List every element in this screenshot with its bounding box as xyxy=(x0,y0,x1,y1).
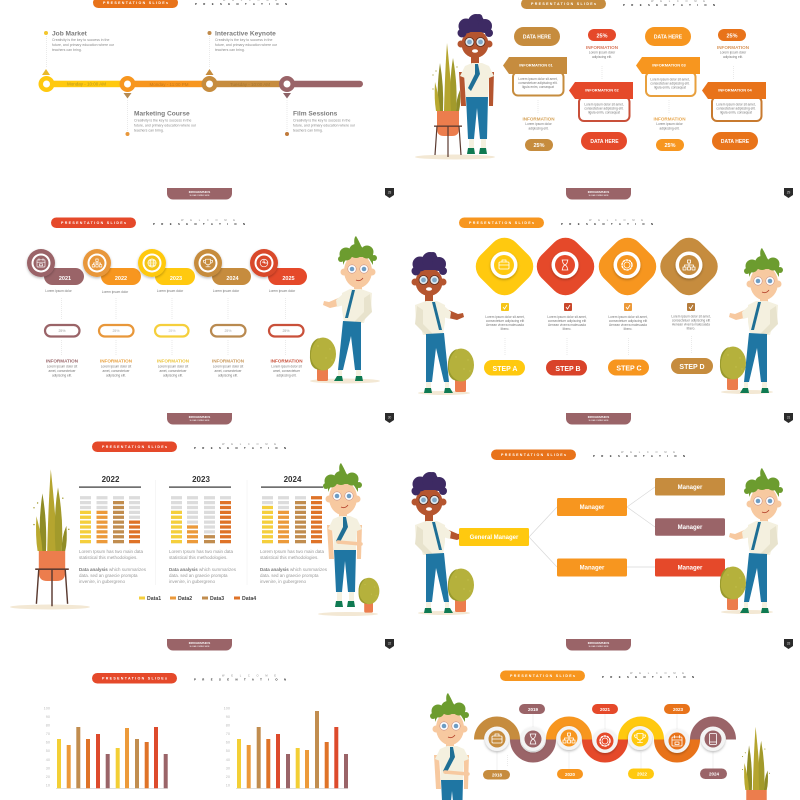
step 2025: amet, consectetuer xyxy=(273,369,301,373)
bar chart: left: 100 xyxy=(44,706,50,710)
slide header: PRESENTATION SLIDEs xyxy=(102,445,167,449)
slide 32 footer tab: INFOGRAPHICS xyxy=(189,641,210,645)
column 3: 25% xyxy=(664,143,676,149)
panel: slide 30 footer tab: INFOGRAPHICS xyxy=(189,415,210,419)
step D: consectetuer adipiscing elit xyxy=(672,318,710,322)
step C: consectetuer adipiscing elit xyxy=(609,319,647,323)
milestone: Marketing Course: Creativity is the key to success in the xyxy=(134,118,191,122)
step 2024 xyxy=(194,249,251,378)
text block: 2024: statistical this methodologies. xyxy=(260,555,319,560)
bar chart: right: 90 xyxy=(226,715,230,719)
slide 31 footer tab: INFOGRAPHICS xyxy=(588,415,609,419)
bar chart: left: 50 xyxy=(46,749,50,753)
step 2021: 25% xyxy=(58,329,66,333)
page badge 33 xyxy=(784,639,793,649)
text block: 2023 xyxy=(169,549,237,584)
page badge 30: 30 xyxy=(388,416,391,420)
column 3: INFORMATION xyxy=(653,116,686,122)
legend: Data3 xyxy=(210,596,224,602)
slide header: WELCOME xyxy=(222,674,276,678)
panel: slide 32 data bars xyxy=(10,442,379,616)
node: Manager level 3 tan xyxy=(655,478,725,496)
column 4: DATA HERE xyxy=(721,139,750,145)
node 2021: 2021 xyxy=(600,707,611,712)
column 1: Lorem ipsum dolor xyxy=(525,122,553,126)
legend xyxy=(139,596,256,602)
footer tab xyxy=(167,188,232,200)
slide header: PRESENTATION SLIDEs xyxy=(102,677,167,681)
node: Manager level 3 mauve xyxy=(655,518,725,536)
step 2025: adipiscing elit. xyxy=(276,374,297,378)
milestone: Job Market: Job Market xyxy=(52,30,88,37)
column 2: Lorem ipsum dolor xyxy=(589,50,616,54)
footer tab: INFOGRAPHICS xyxy=(588,190,609,194)
step B: Lorem ipsum dolor sit amet, xyxy=(547,315,587,319)
panel: slide 33 org chart xyxy=(412,450,783,615)
footer tab: INFOGRAPHICS xyxy=(189,190,210,194)
node 2023: 2023 xyxy=(673,707,684,712)
column 4: Lorem ipsum dolor sit amet, xyxy=(716,102,756,106)
milestone: Film Sessions: Film Sessions xyxy=(293,110,338,118)
node 2021 xyxy=(592,704,618,753)
step 2024: adipiscing elit. xyxy=(218,374,238,378)
step B: Aenean viverra malesuada xyxy=(548,323,586,327)
illustration: presenting man with cactus xyxy=(310,236,380,384)
node: Manager level 2 top: Manager xyxy=(580,505,605,511)
step D: libero. xyxy=(687,326,695,330)
timeline bar: Tuesday - 10:00 AM xyxy=(230,82,270,87)
step 2024: amet, consectetuer xyxy=(214,369,242,373)
slide header: WELCOME xyxy=(621,450,675,454)
milestone: Job Market xyxy=(42,30,115,75)
step D xyxy=(654,231,724,374)
column 1: INFORMATION 01 xyxy=(519,62,554,68)
connector lines xyxy=(497,714,713,770)
column 4: 25% xyxy=(726,34,738,40)
panel: slide 30 footer tab: SLOGAN COMPANY HERE xyxy=(190,419,209,422)
node 2018 xyxy=(483,727,510,780)
node: Manager level 3 mauve: Manager xyxy=(678,525,703,531)
footer tab: SLOGAN COMPANY HERE xyxy=(589,194,608,197)
bar chart: right: 50 xyxy=(226,749,230,753)
text block: 2022: Data analysis which summarizes xyxy=(79,567,147,572)
step B xyxy=(530,231,601,376)
column 3: ligula enim, consequat xyxy=(654,86,686,90)
milestone: Marketing Course: future, and primary education where our xyxy=(134,124,197,128)
text block: 2023: Data analysis which summarizes xyxy=(169,567,237,572)
step 2022: Lorem ipsum dolor xyxy=(102,290,129,294)
timeline bar: Monday - 10:00 AM xyxy=(67,82,106,86)
slide header: PRESENTATION xyxy=(194,446,286,450)
panel: slide 30 footer tab xyxy=(167,413,232,424)
panel: slide 28 timeline xyxy=(38,0,394,200)
timeline bar xyxy=(38,76,363,92)
step 2025: INFORMATION xyxy=(270,358,303,364)
node 2024: 2024 xyxy=(709,772,720,776)
illustration: standing man with cactus xyxy=(318,463,379,616)
node: Manager level 3 red xyxy=(655,558,725,576)
column 1: consectetuer adipiscing elit. xyxy=(518,81,558,85)
chart: 2022: 2022 xyxy=(102,475,120,484)
column 1 xyxy=(503,27,567,151)
slide header: PRESENTATION xyxy=(194,678,286,682)
illustration: presenting man right xyxy=(720,468,783,614)
slide header xyxy=(491,450,685,460)
step 2021: adipiscing elit. xyxy=(52,374,72,378)
milestone: Interactive Keynote: teachers can bring. xyxy=(215,48,245,52)
column 2: ligula enim, consequat xyxy=(588,110,620,114)
milestone: Job Market: teachers can bring. xyxy=(52,48,82,52)
slide header xyxy=(521,0,715,9)
illustration: standing man xyxy=(430,693,469,800)
column 4: INFORMATION xyxy=(717,45,750,50)
bar chart: right: 60 xyxy=(226,741,230,745)
node 2022 xyxy=(628,726,654,779)
step 2021: Lorem ipsum dolor sit xyxy=(47,364,77,368)
illustration: standing boy xyxy=(458,14,494,154)
page badge 31 xyxy=(784,413,793,423)
column 2 xyxy=(569,29,633,150)
node: Manager level 3 red: Manager xyxy=(678,566,703,572)
column 3: consectetuer adipiscing elit. xyxy=(650,82,690,86)
text block: 2024: Data analysis which summarizes xyxy=(260,567,328,572)
text block: 2024 xyxy=(260,549,328,584)
column 3: INFORMATION 03 xyxy=(652,62,687,68)
milestone: Film Sessions: future, and primary education where our xyxy=(293,124,356,128)
slide header: PRESENTATION SLIDEs xyxy=(469,221,534,225)
text block: 2023: invenire, in gubergreno xyxy=(169,579,216,584)
step B: libero. xyxy=(563,327,571,331)
slide header: PRESENTATION SLIDEs xyxy=(103,1,168,5)
bar chart: left: 30 xyxy=(46,766,50,770)
bar chart: left: 70 xyxy=(46,732,50,736)
slide header xyxy=(500,670,694,681)
slide 31 footer tab: SLOGAN COMPANY HERE xyxy=(589,419,608,422)
node 2019: 2019 xyxy=(528,707,539,712)
milestone: Job Market: Creativity is the key to success in the xyxy=(52,38,109,42)
text block: 2022 xyxy=(79,549,147,584)
column 3: adipiscing elit. xyxy=(659,126,680,130)
step 2023: amet, consectetuer xyxy=(159,369,187,373)
step 2022: 25% xyxy=(112,329,120,333)
step 2025: Lorem ipsum dolor sit xyxy=(271,364,302,368)
panel: slide 31 four steps xyxy=(412,218,783,395)
column 2: INFORMATION xyxy=(586,45,619,50)
slide header: PRESENTATION SLIDEs xyxy=(501,453,566,457)
column 3 xyxy=(636,27,700,151)
panel: slide 30 yearly steps xyxy=(27,218,380,384)
panel: slide 35 wave timeline xyxy=(430,670,770,800)
milestone: Marketing Course: teachers can bring. xyxy=(134,128,164,132)
slide 32 footer tab: SLOGAN COMPANY HERE xyxy=(190,645,209,648)
legend: Data4 xyxy=(242,596,256,602)
illustration: plant on stand xyxy=(10,469,90,610)
step 2023: 2023 xyxy=(170,276,182,282)
column 2: 25% xyxy=(596,34,608,40)
column 1: INFORMATION xyxy=(522,116,555,122)
column 3: Lorem ipsum dolor sit amet, xyxy=(650,78,690,82)
step 2022 xyxy=(83,249,141,378)
slide header: WELCOME xyxy=(589,218,643,222)
node 2022: 2022 xyxy=(637,772,648,776)
step D: Lorem ipsum dolor sit amet, xyxy=(671,314,711,318)
node 2024 xyxy=(700,727,727,779)
milestone: Marketing Course xyxy=(124,93,197,136)
text block: 2023: data. sed an graecie prompta xyxy=(169,573,228,578)
column 4: INFORMATION 04 xyxy=(718,88,753,92)
step D: STEP D xyxy=(679,364,705,371)
node 2020: 2020 xyxy=(565,772,576,777)
slide header: PRESENTATION xyxy=(195,2,287,6)
step 2024: Lorem ipsum dolor xyxy=(213,289,240,293)
page badge 32: 32 xyxy=(388,642,391,646)
slide header: WELCOME xyxy=(181,218,235,222)
panel: slide 34 bar charts xyxy=(44,673,348,789)
step B: STEP B xyxy=(555,366,581,373)
text block: 2024: invenire, in gubergreno xyxy=(260,579,307,584)
step C: STEP C xyxy=(616,366,642,372)
text block: 2022: data. sed an graecie prompta xyxy=(79,573,138,578)
column 1: ligula enim, consequat xyxy=(522,85,554,89)
step 2025: Lorem ipsum dolor xyxy=(269,289,296,293)
illustration: presenting man right xyxy=(720,248,783,394)
step D: Aenean viverra malesuada xyxy=(672,322,710,326)
column 2: INFORMATION 02 xyxy=(585,88,620,92)
column 4: consectetuer adipiscing elit. xyxy=(716,106,756,110)
chart: 2023 xyxy=(169,475,231,543)
column 3: DATA HERE xyxy=(654,34,683,40)
step 2024: Lorem ipsum dolor sit xyxy=(213,364,243,368)
step A xyxy=(469,231,540,376)
slide header: PRESENTATION xyxy=(602,675,694,679)
illustration: plant xyxy=(742,727,770,800)
bar chart: left: 40 xyxy=(46,758,50,762)
wave ribbon xyxy=(479,722,731,758)
milestone: Job Market: future, and primary education where our xyxy=(52,43,115,47)
step C: Lorem ipsum dolor sit amet, xyxy=(608,315,648,319)
column 4: ligula enim, consequat xyxy=(720,110,752,114)
page badge xyxy=(385,188,394,198)
step 2021: Lorem ipsum dolor xyxy=(45,289,73,293)
slide header: PRESENTATION xyxy=(623,3,715,7)
step C: Aenean viverra malesuada xyxy=(609,323,647,327)
bar chart: left: 20 xyxy=(46,775,50,779)
text block: 2022: statistical this methodologies. xyxy=(79,555,138,560)
milestone: Marketing Course: Marketing Course xyxy=(134,110,190,118)
milestone: Interactive Keynote: Creativity is the key to success in the xyxy=(215,38,272,42)
page badge 31: 31 xyxy=(787,416,790,420)
slide header: PRESENTATION xyxy=(593,454,685,458)
node: Manager level 2 bottom xyxy=(557,558,627,576)
milestone: Film Sessions: Creativity is the key to success in the xyxy=(293,118,350,122)
timeline bar: Monday - 11:00 PM xyxy=(150,82,189,87)
step 2021: 2021 xyxy=(59,276,71,282)
slide header xyxy=(92,442,286,452)
column 4 xyxy=(702,29,766,150)
step 2023: adipiscing elit. xyxy=(163,374,183,378)
milestone: Interactive Keynote xyxy=(206,30,278,75)
step A: libero. xyxy=(501,327,509,331)
step A: consectetuer adipiscing elit xyxy=(486,319,524,323)
step A: STEP A xyxy=(493,366,517,373)
step B: consectetuer adipiscing elit xyxy=(548,319,586,323)
step 2022: Lorem ipsum dolor sit xyxy=(101,364,131,368)
column 4: Lorem ipsum dolor xyxy=(720,50,747,54)
slide header xyxy=(459,218,653,228)
illustration: plant on stand xyxy=(415,43,495,160)
slide 33 footer tab: INFOGRAPHICS xyxy=(588,641,609,645)
step A: Lorem ipsum dolor sit amet, xyxy=(485,315,525,319)
column 1: Lorem ipsum dolor sit amet, xyxy=(518,77,558,81)
node: Manager level 3 tan: Manager xyxy=(678,485,703,491)
bar chart: right xyxy=(224,706,348,789)
step C xyxy=(592,231,663,376)
node: Manager level 2 top xyxy=(557,498,627,516)
column 3: Lorem ipsum dolor xyxy=(656,122,684,126)
illustration: presenting boy left xyxy=(412,252,474,395)
slide 32 footer tab xyxy=(167,639,232,650)
step A: Aenean viverra malesuada xyxy=(486,323,524,327)
bar chart: left: 80 xyxy=(46,724,50,728)
column 1: adipiscing elit. xyxy=(528,126,549,130)
slide 31 footer tab xyxy=(566,413,631,424)
milestone: Film Sessions: teachers can bring. xyxy=(293,128,323,132)
page badge: 29 xyxy=(787,190,790,194)
milestone: Interactive Keynote: future, and primary education where our xyxy=(215,43,278,47)
slide header: PRESENTATION SLIDEs xyxy=(510,674,575,678)
step 2023: INFORMATION xyxy=(157,358,190,364)
milestone: Interactive Keynote: Interactive Keynote xyxy=(215,30,276,37)
node 2018: 2018 xyxy=(492,772,503,778)
bar chart: right: 10 xyxy=(226,783,230,787)
legend: Data1 xyxy=(147,596,161,602)
legend: Data2 xyxy=(178,596,192,602)
page badge 32 xyxy=(385,639,394,649)
step 2022: INFORMATION xyxy=(100,358,133,364)
bar chart: right: 80 xyxy=(226,724,230,728)
illustration: presenting boy left xyxy=(412,472,474,615)
text block: 2023: Lorem Ipsum has two main data xyxy=(169,549,234,554)
slide header xyxy=(51,218,245,228)
bar chart: right: 100 xyxy=(224,706,230,710)
slide 33 footer tab: SLOGAN COMPANY HERE xyxy=(589,645,608,648)
bar chart: right: 40 xyxy=(226,758,230,762)
bar chart: right: 20 xyxy=(226,775,230,779)
slide header: WELCOME xyxy=(630,671,684,675)
page badge: 28 xyxy=(388,190,391,194)
column 1: DATA HERE xyxy=(523,34,552,40)
column dividers xyxy=(156,480,247,585)
slide header: WELCOME xyxy=(222,442,276,446)
text block: 2022: invenire, in gubergreno xyxy=(79,579,126,584)
chart: 2023: 2023 xyxy=(192,475,210,484)
bar chart: left xyxy=(44,706,168,789)
column 2: Lorem ipsum dolor sit amet, xyxy=(584,102,624,106)
chart: 2022 xyxy=(79,475,141,543)
slide header: WELCOME xyxy=(651,0,705,3)
node: General Manager xyxy=(459,528,529,546)
bar chart: left: 90 xyxy=(46,715,50,719)
page badge xyxy=(784,188,793,198)
slide header: PRESENTATION SLIDEs xyxy=(531,2,596,6)
column 1: 25% xyxy=(533,143,545,149)
bar chart: right: 30 xyxy=(226,766,230,770)
milestone: Film Sessions xyxy=(283,93,356,136)
step 2025 xyxy=(250,249,307,378)
footer tab xyxy=(566,188,631,200)
node: Manager level 2 bottom: Manager xyxy=(580,566,605,572)
bar chart: right: 70 xyxy=(226,732,230,736)
text block: 2022: Lorem Ipsum has two main data xyxy=(79,549,144,554)
column 2: DATA HERE xyxy=(590,139,619,145)
page badge 33: 33 xyxy=(787,642,790,646)
column 2: adipiscing elit. xyxy=(592,55,612,59)
slide header: PRESENTATION SLIDEs xyxy=(61,221,126,225)
node 2020 xyxy=(557,726,583,779)
slide header xyxy=(92,673,286,684)
text block: 2024: Lorem Ipsum has two main data xyxy=(260,549,325,554)
step 2023: 25% xyxy=(168,329,176,333)
step 2022: 2022 xyxy=(115,276,127,282)
chart: 2024 xyxy=(261,475,323,543)
slide 33 footer tab xyxy=(566,639,631,650)
node: General Manager: General Manager xyxy=(470,535,519,541)
text block: 2023: statistical this methodologies. xyxy=(169,555,228,560)
column 2: consectetuer adipiscing elit. xyxy=(584,106,624,110)
step 2023 xyxy=(138,249,195,378)
step 2023: Lorem ipsum dolor xyxy=(157,289,184,293)
step 2021 xyxy=(27,249,84,378)
step 2021: INFORMATION xyxy=(46,358,79,364)
step 2025: 25% xyxy=(282,329,290,333)
step 2025: 2025 xyxy=(282,276,295,282)
step 2023: Lorem ipsum dolor sit xyxy=(158,364,188,368)
slide header: PRESENTATION xyxy=(153,222,245,226)
step 2022: adipiscing elit. xyxy=(106,374,126,378)
step 2024: 2024 xyxy=(226,276,240,282)
column 4: adipiscing elit. xyxy=(723,55,743,59)
panel: slide 29 information columns xyxy=(415,0,793,200)
node 2023 xyxy=(664,704,690,753)
node 2019 xyxy=(519,704,545,751)
step 2021: amet, consectetuer xyxy=(48,369,76,373)
slide header: PRESENTATION xyxy=(561,222,653,226)
page badge 30 xyxy=(385,413,394,423)
step 2024: INFORMATION xyxy=(212,358,245,364)
step 2022: amet, consectetuer xyxy=(102,369,130,373)
text block: 2024: data. sed an graecie prompta xyxy=(260,573,319,578)
footer tab: SLOGAN COMPANY HERE xyxy=(190,194,209,197)
bar chart: left: 10 xyxy=(46,783,50,787)
chart: 2024: 2024 xyxy=(284,475,302,484)
bar chart: left: 60 xyxy=(46,741,50,745)
step 2024: 25% xyxy=(224,329,232,333)
slide header xyxy=(93,0,287,8)
connector lines xyxy=(529,487,655,567)
step C: libero. xyxy=(624,327,632,331)
